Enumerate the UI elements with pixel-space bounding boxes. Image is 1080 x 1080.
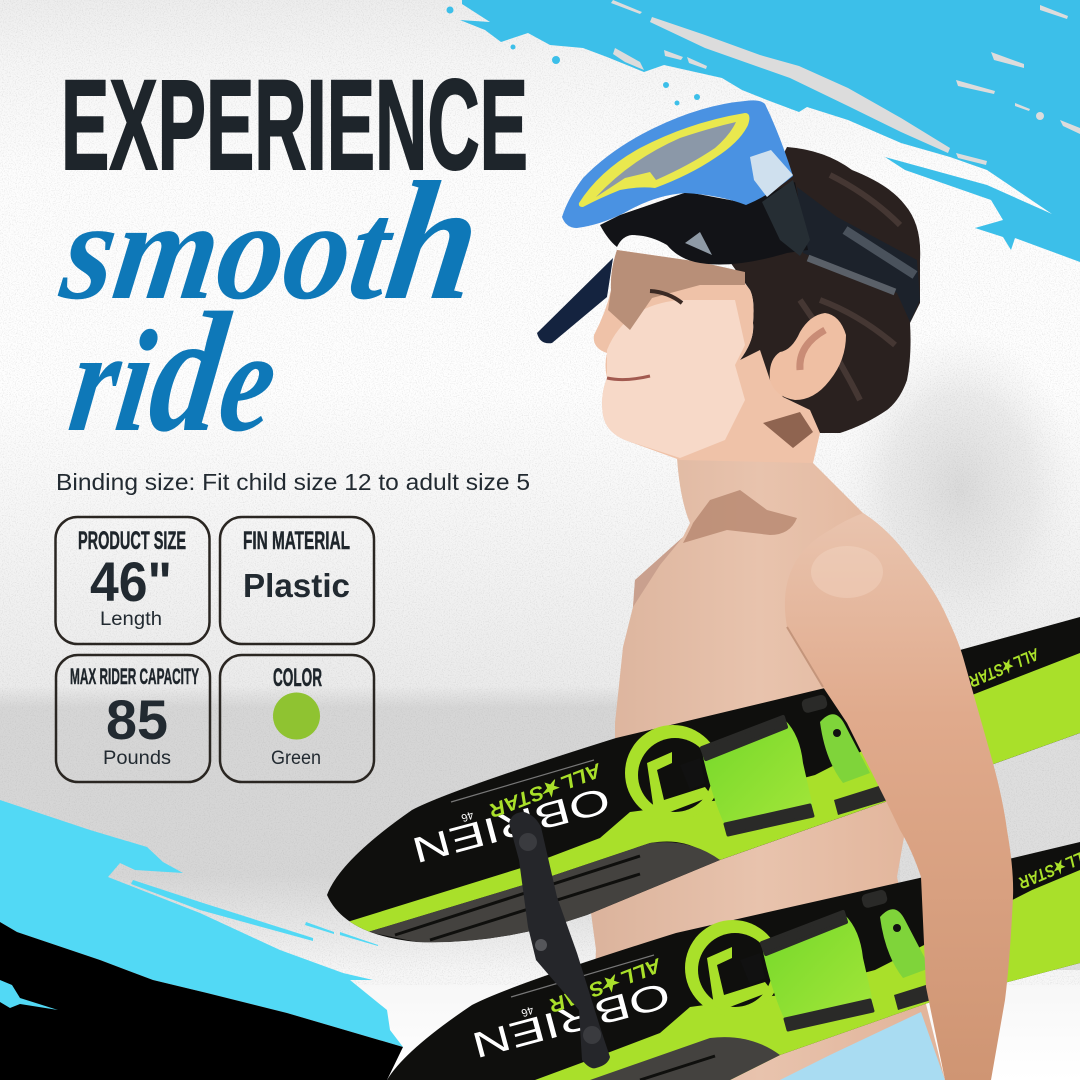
water ski: upper	[327, 617, 1080, 942]
card: fin material: FIN MATERIAL	[243, 527, 350, 555]
brush stroke: top right cyan	[446, 0, 1080, 262]
script heading: ride: ride	[61, 278, 289, 468]
boy's head	[594, 147, 920, 463]
card: max rider capacity: Pounds	[103, 747, 171, 769]
shorts	[780, 1012, 945, 1080]
blue frame	[562, 100, 793, 228]
card: color	[220, 655, 374, 782]
ear	[770, 313, 846, 400]
binding size text: Binding size: Fit child size 12 to adult size 5	[56, 469, 530, 495]
black corner	[0, 922, 403, 1080]
card: product size: 46"	[90, 550, 172, 613]
boy's arm	[785, 513, 1013, 1080]
yellow lens rim	[579, 113, 749, 207]
water ski: upper: ALL★STAR	[966, 644, 1043, 691]
card: color: COLOR	[273, 664, 322, 692]
water ski: lower	[387, 842, 1080, 1080]
card: max rider capacity: 85	[106, 688, 168, 751]
forehead shadow	[608, 250, 745, 330]
smile	[607, 376, 650, 380]
card: product size	[56, 517, 210, 644]
diving mask	[537, 100, 920, 343]
hair	[730, 147, 920, 433]
black ski connector strap	[509, 812, 610, 1068]
card: max rider capacity: MAX RIDER CAPACITY	[70, 664, 199, 689]
ribbed buckle strap	[762, 180, 810, 256]
card: color: Green	[271, 748, 321, 769]
title: EXPERIENCE: EXPERIENCE	[61, 54, 528, 197]
boy's torso	[590, 440, 960, 1080]
front strap	[537, 258, 613, 343]
script heading: smooth: smooth	[52, 147, 491, 335]
face	[594, 250, 820, 463]
neck shadow	[683, 490, 797, 543]
eye	[650, 291, 682, 303]
card: fin material	[220, 517, 374, 644]
card: max rider capacity	[56, 655, 210, 782]
lens glass	[596, 122, 736, 197]
long back strap	[797, 187, 920, 322]
card: product size: Length	[100, 608, 162, 630]
clear buckle	[750, 150, 793, 197]
card: product size: PRODUCT SIZE	[78, 527, 186, 555]
card: fin material: Plastic	[243, 567, 350, 604]
shadow under ear	[763, 412, 813, 448]
brush stroke: bottom left cyan	[0, 800, 403, 1080]
grey paint streaks	[611, 0, 1080, 165]
black mask skirt	[600, 182, 808, 265]
chest side shadow	[633, 537, 683, 607]
